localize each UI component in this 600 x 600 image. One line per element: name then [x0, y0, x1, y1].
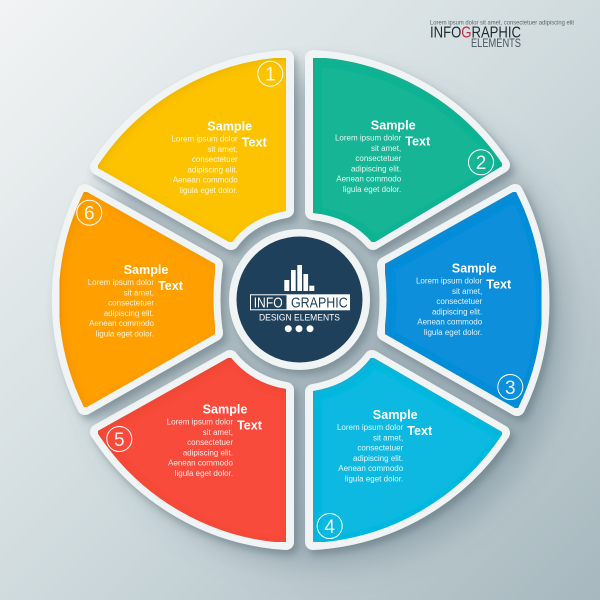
- panel 6 badge: 6: [84, 204, 95, 224]
- header logo: [430, 20, 574, 50]
- panel 3 text: [416, 262, 512, 337]
- center disc: [236, 236, 362, 362]
- panel 5 text: ligula eget dolor.: [175, 469, 233, 478]
- panel 2 badge: [468, 150, 494, 175]
- panel 4 text: consectetuer: [357, 444, 404, 453]
- panel 1: yellow segment: [98, 58, 286, 242]
- panel 4 frame: [313, 358, 502, 542]
- panel 5 text: sit amet,: [203, 428, 233, 437]
- panel 1 text: consectetuer: [192, 155, 238, 164]
- header title: INFOGRAPHIC: [430, 24, 521, 41]
- panel 6 text: Sample: [124, 263, 168, 277]
- panel 1 text: Aenean commodo: [173, 176, 238, 185]
- panel 1 text: ligula eget dolor.: [179, 186, 238, 195]
- panel 6 text: ligula eget dolor.: [96, 329, 154, 338]
- panel 3 badge: [498, 374, 523, 400]
- panel 4 text: Text: [407, 424, 433, 438]
- panel 5 text: Text: [237, 418, 263, 432]
- icon: bar chart: [284, 265, 314, 291]
- panel 5 text: Lorem ipsum dolor: [167, 418, 233, 427]
- panel 3 text: consectetuer: [436, 297, 483, 306]
- panel 3 frame: [385, 192, 541, 408]
- center title: [250, 294, 350, 311]
- panel 3: blue segment: [385, 192, 541, 408]
- header subtitle: ELEMENTS: [471, 38, 521, 50]
- panel 4 text: ligula eget dolor.: [345, 474, 403, 483]
- panel 1 text: Lorem ipsum dolor: [171, 135, 238, 144]
- panel 1 frame: [98, 58, 286, 242]
- center ring: [229, 229, 370, 370]
- panel 3 fill: [385, 192, 541, 408]
- panel 1 text: adipiscing elit.: [187, 165, 238, 174]
- panel 3 text: Aenean commodo: [417, 318, 483, 327]
- center title: INFO: [254, 294, 283, 311]
- panel 5 frame: [98, 358, 286, 542]
- panel 6 badge: [77, 200, 102, 225]
- panel 2 fill: [313, 58, 502, 242]
- panel 4 text: Sample: [373, 408, 418, 422]
- panel 6 text: consectetuer: [108, 299, 154, 308]
- panel 1 badge: 1: [265, 64, 276, 86]
- panel 6 text: adipiscing elit.: [104, 309, 154, 318]
- panel 5 text: Aenean commodo: [168, 459, 234, 468]
- center badge: [229, 229, 370, 370]
- panel 1 text: [171, 120, 267, 195]
- panel 3 text: Sample: [452, 262, 497, 276]
- panel 6 text: Lorem ipsum dolor: [88, 278, 154, 287]
- panel 5 badge: 5: [114, 430, 125, 451]
- panel 2: teal segment: [313, 58, 502, 242]
- panel 1 fill: [98, 58, 286, 242]
- panel 2 text: [335, 118, 431, 194]
- center title: GRAPHIC: [291, 294, 348, 311]
- header tagline: Lorem ipsum dolor sit amet, consectetuer adipiscing elit: [430, 20, 574, 26]
- panel 1 text: sit amet,: [207, 145, 238, 154]
- panel 3 badge: 3: [505, 378, 516, 399]
- panel 2 text: sit amet,: [371, 144, 401, 153]
- panel 4 text: Lorem ipsum dolor: [337, 423, 404, 432]
- panel 3 text: Lorem ipsum dolor: [416, 277, 483, 286]
- panel 4 text: Aenean commodo: [338, 464, 404, 473]
- panel 4 badge: 4: [324, 517, 335, 538]
- panel 6 text: Text: [158, 279, 184, 293]
- panel 4 text: sit amet,: [373, 434, 403, 442]
- long wheel shadow: [76, 76, 568, 568]
- center subtitle: DESIGN ELEMENTS: [259, 313, 340, 324]
- panel 6 fill: [60, 192, 215, 407]
- panel 5 text: adipiscing elit.: [183, 448, 233, 457]
- panel 4 badge: [317, 514, 342, 538]
- panel 3 text: Text: [486, 278, 512, 292]
- panel 2 text: Sample: [371, 118, 416, 132]
- panel 3 text: ligula eget dolor.: [424, 328, 482, 337]
- panel 3 text: sit amet,: [452, 287, 482, 296]
- center dots: [285, 325, 314, 332]
- panel 2 frame: [313, 58, 502, 242]
- panel 6 text: Aenean commodo: [89, 319, 155, 328]
- panel 2 text: Lorem ipsum dolor: [335, 134, 402, 143]
- panel 4: cyan segment: [313, 358, 502, 542]
- panel 5 text: consectetuer: [187, 438, 233, 447]
- panel 2 text: ligula eget dolor.: [343, 185, 401, 194]
- panel 1 text: Sample: [207, 120, 252, 134]
- panel 5 fill: [98, 358, 286, 542]
- panel 1 text: Text: [242, 136, 267, 150]
- panel 3 text: adipiscing elit.: [432, 307, 482, 316]
- panel 5 badge: [107, 426, 132, 452]
- panel 6 frame: [60, 192, 215, 407]
- panel 5: red segment: [98, 358, 286, 542]
- panel 4 fill: [313, 358, 502, 542]
- panel 1 badge: [258, 61, 283, 86]
- panel 2 badge: 2: [476, 153, 486, 174]
- panel 5 text: Sample: [203, 402, 247, 416]
- panel 4 text: adipiscing elit.: [353, 454, 403, 463]
- panel 2 text: Aenean commodo: [336, 175, 402, 184]
- panel 6: orange segment: [60, 192, 215, 407]
- panel 4 text: [337, 408, 433, 483]
- panel 2 text: adipiscing elit.: [351, 164, 401, 173]
- panel 6 text: sit amet,: [124, 288, 154, 298]
- panel 2 text: Text: [405, 134, 431, 148]
- panel 2 text: consectetuer: [355, 154, 402, 163]
- panel 5 text: [167, 402, 263, 478]
- panel 6 text: [88, 263, 184, 338]
